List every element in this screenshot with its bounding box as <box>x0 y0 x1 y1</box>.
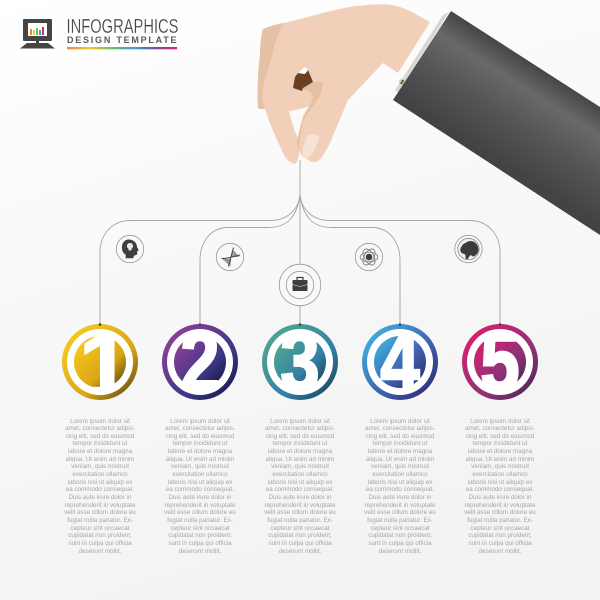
text block: step 4: laboris nisi ut aliquip ex <box>368 479 432 486</box>
text block: step 2: labore et dolore magna <box>168 448 232 455</box>
text block: step 3: ea commodo consequat. <box>266 486 334 493</box>
finger gap <box>289 106 310 139</box>
text block: step 1: labore et dolore magna <box>68 448 132 455</box>
text block: step 5: cing elit, sed do eiusmod <box>466 433 534 440</box>
step 4 badge <box>362 323 438 400</box>
text block: step 2: ea commodo consequat. <box>166 486 234 493</box>
text block: step 3: velit esse cillum dolore eu <box>264 509 336 516</box>
text block: step 3: cing elit, sed do eiusmod <box>266 433 334 440</box>
text block: step 5: laboris nisi ut aliquip ex <box>468 479 532 486</box>
logo title: INFOGRAPHICS <box>66 16 178 38</box>
fingernail <box>303 134 319 158</box>
palm and fingers <box>258 4 430 164</box>
text block: step 5: Duis aute irure dolor in <box>469 494 531 501</box>
text block: step 5: tempor incididunt ut <box>473 440 527 447</box>
step 3 badge: 3 <box>280 313 320 410</box>
text block: step 1: veniam, quis nostrud <box>71 463 129 470</box>
text block: step 1: amet, consectetur adipis- <box>65 425 135 432</box>
text block: step 4: exercitation ullamco <box>372 471 428 478</box>
text block: step 1: laboris nisi ut aliquip ex <box>68 479 132 486</box>
text block: step 5: amet, consectetur adipis- <box>465 425 535 432</box>
icon: dna helix <box>216 243 244 271</box>
thumb shadow <box>297 82 323 153</box>
text block: step 1: sunt in culpa qui officia <box>68 540 132 547</box>
text block: step 2: cupidatat non proident, <box>168 532 232 539</box>
text block: step 4: reprehenderit in voluptate <box>365 502 435 509</box>
text block: step 5: sunt in culpa qui officia <box>468 540 532 547</box>
text block: step 3: exercitation ullamco <box>272 471 328 478</box>
text block: step 2: exercitation ullamco <box>172 471 228 478</box>
text block: step 2: laboris nisi ut aliquip ex <box>168 479 232 486</box>
text block: step 5: exercitation ullamco <box>472 471 528 478</box>
text block: step 2: Duis aute irure dolor in <box>169 494 231 501</box>
text block: step 2: cepteur sint occaecat <box>170 525 230 532</box>
text block: step 1: aliqua. Ut enim ad minim <box>66 456 134 463</box>
text block: step 3 <box>264 418 336 555</box>
icon: head with lightbulb <box>116 235 144 263</box>
text block: step 3: cupidatat non proident, <box>268 532 332 539</box>
finger hole <box>293 70 313 91</box>
text block: step 2: Lorem ipsum dolor sit <box>170 418 230 424</box>
text block: step 5: labore et dolore magna <box>468 448 532 455</box>
icon: briefcase in double ring <box>279 264 321 306</box>
text block: step 2: fugiat nulla pariatur. Ex- <box>167 517 233 524</box>
text block: step 5: Lorem ipsum dolor sit <box>470 418 530 424</box>
text block: step 4: Lorem ipsum dolor sit <box>370 418 430 424</box>
text block: step 2: veniam, quis nostrud <box>171 463 229 470</box>
hand <box>258 4 449 164</box>
text block: step 2 <box>164 418 236 555</box>
text block: step 3: fugiat nulla pariatur. Ex- <box>267 517 333 524</box>
text block: step 5: cepteur sint occaecat <box>470 525 530 532</box>
text block: step 5: aliqua. Ut enim ad minim <box>466 456 534 463</box>
back of hand shadow <box>258 23 284 109</box>
text block: step 2: aliqua. Ut enim ad minim <box>166 456 234 463</box>
text block: step 5: veniam, quis nostrud <box>471 463 529 470</box>
text block: step 2: tempor incididunt ut <box>173 440 227 447</box>
logo: monitor icon <box>20 19 55 48</box>
text block: step 4: tempor incididunt ut <box>373 440 427 447</box>
text block: step 4: cepteur sint occaecat <box>370 525 430 532</box>
text block: step 3: Lorem ipsum dolor sit <box>270 418 330 424</box>
text block: step 5: velit esse cillum dolore eu <box>464 509 536 516</box>
text block: step 5: ea commodo consequat. <box>466 486 534 493</box>
text block: step 3: veniam, quis nostrud <box>271 463 329 470</box>
text block: step 1: fugiat nulla pariatur. Ex- <box>67 517 133 524</box>
text block: step 1: velit esse cillum dolore eu <box>64 509 136 516</box>
text block: step 3: laboris nisi ut aliquip ex <box>268 479 332 486</box>
text block: step 3: aliqua. Ut enim ad minim <box>266 456 334 463</box>
text block: step 4: Duis aute irure dolor in <box>369 494 431 501</box>
text block: step 3: cepteur sint occaecat <box>270 525 330 532</box>
text block: step 4: cupidatat non proident, <box>368 532 432 539</box>
text block: step 4: fugiat nulla pariatur. Ex- <box>367 517 433 524</box>
text block: step 1: cupidatat non proident, <box>68 532 132 539</box>
icon: globe <box>455 235 482 263</box>
text block: step 1: ea commodo consequat. <box>66 486 134 493</box>
step 1 badge <box>62 323 138 400</box>
text block: step 3: Duis aute irure dolor in <box>269 494 331 501</box>
step 4 badge: 4 <box>380 313 420 410</box>
text block: step 1: reprehenderit in voluptate <box>65 502 135 509</box>
text block: step 4: amet, consectetur adipis- <box>365 425 435 432</box>
text block: step 5 <box>464 418 536 555</box>
step 5 badge: 5 <box>480 313 520 410</box>
text block: step 1: Lorem ipsum dolor sit <box>70 418 130 424</box>
text block: step 4: deserunt mollit. <box>379 548 421 555</box>
step 3 badge <box>262 323 338 400</box>
text block: step 5: deserunt mollit. <box>479 548 521 555</box>
text block: step 4: aliqua. Ut enim ad minim <box>366 456 434 463</box>
text block: step 1: tempor incididunt ut <box>73 440 127 447</box>
infographic canvas <box>20 4 600 400</box>
text block: step 3: deserunt mollit. <box>279 548 321 555</box>
text block: step 5: reprehenderit in voluptate <box>465 502 535 509</box>
suit sleeve <box>393 11 600 235</box>
step 2 badge <box>162 323 238 400</box>
text block: step 2: deserunt mollit. <box>179 548 221 555</box>
text block: step 4: cing elit, sed do eiusmod <box>366 433 434 440</box>
text block: step 1: deserunt mollit. <box>79 548 121 555</box>
text block: step 1: cing elit, sed do eiusmod <box>66 433 134 440</box>
text block: step 4: veniam, quis nostrud <box>371 463 429 470</box>
step 2 badge: 2 <box>180 313 220 410</box>
text block: step 1: exercitation ullamco <box>72 471 128 478</box>
text block: step 3: amet, consectetur adipis- <box>265 425 335 432</box>
cuff button <box>399 79 405 85</box>
shirt cuff <box>348 15 444 100</box>
text block: step 2: amet, consectetur adipis- <box>165 425 235 432</box>
icon: atom <box>355 243 383 271</box>
text block: step 2: cing elit, sed do eiusmod <box>166 433 234 440</box>
text block: step 3: labore et dolore magna <box>268 448 332 455</box>
text block: step 4 <box>364 418 436 555</box>
text block: step 4: sunt in culpa qui officia <box>368 540 432 547</box>
text block: step 3: sunt in culpa qui officia <box>268 540 332 547</box>
step 5 badge <box>462 323 538 400</box>
text block: step 3: tempor incididunt ut <box>273 440 327 447</box>
connector lines <box>100 160 500 325</box>
text block: step 1 <box>64 418 136 555</box>
text block: step 1: Duis aute irure dolor in <box>69 494 131 501</box>
text block: step 2: reprehenderit in voluptate <box>165 502 235 509</box>
text block: step 5: cupidatat non proident, <box>468 532 532 539</box>
text block: step 2: velit esse cillum dolore eu <box>164 509 236 516</box>
rainbow underline <box>67 47 177 49</box>
text block: step 4: velit esse cillum dolore eu <box>364 509 436 516</box>
text block: step 1: cepteur sint occaecat <box>70 525 130 532</box>
text block: step 3: reprehenderit in voluptate <box>265 502 335 509</box>
text block: step 5: fugiat nulla pariatur. Ex- <box>467 517 533 524</box>
logo subtitle: DESIGN TEMPLATE <box>67 35 176 45</box>
text block: step 4: labore et dolore magna <box>368 448 432 455</box>
text block: step 2: sunt in culpa qui officia <box>168 540 232 547</box>
text block: step 4: ea commodo consequat. <box>366 486 434 493</box>
step 1 badge: 1 <box>79 313 131 417</box>
